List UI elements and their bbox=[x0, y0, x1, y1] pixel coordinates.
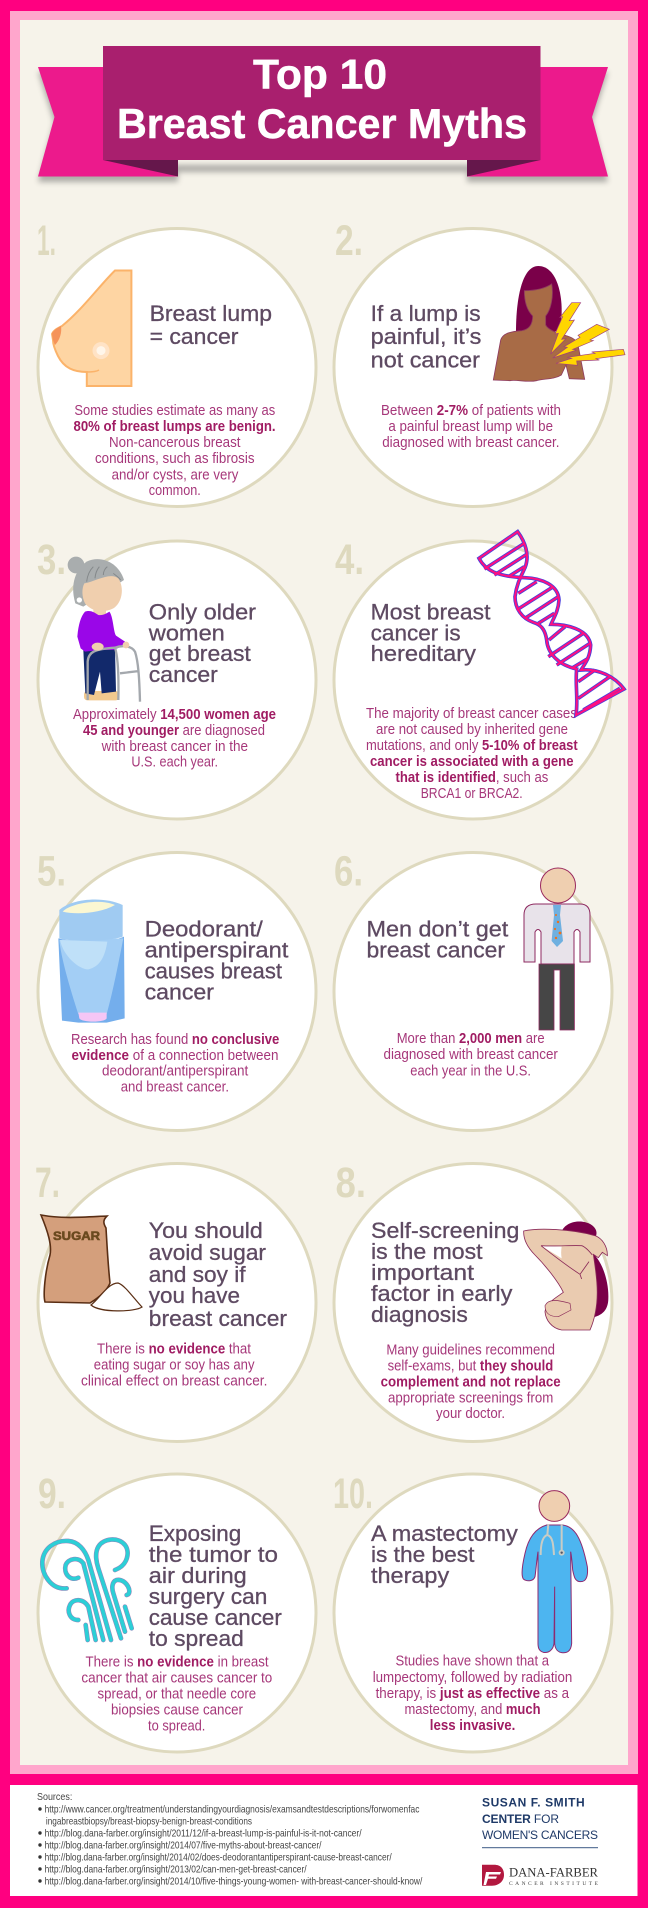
body text: myth 3 bbox=[73, 707, 276, 770]
panel: myth 1 bbox=[37, 217, 316, 506]
heading: myth 9: the tumor to bbox=[149, 1542, 278, 1567]
heading: myth 9: cause cancer bbox=[149, 1605, 282, 1630]
heading: myth 2: If a lump is bbox=[371, 301, 481, 326]
body text: myth 6: diagnosed with breast cancer bbox=[384, 1047, 558, 1063]
body text: myth 9: biopsies cause cancer bbox=[111, 1703, 243, 1719]
heading: myth 6: Men don’t get bbox=[366, 916, 508, 941]
body text: myth 4: are not caused by inherited gene bbox=[376, 722, 568, 738]
panel: myth 7 bbox=[35, 1159, 316, 1442]
body text: myth 5: Research has found no conclusive bbox=[71, 1032, 279, 1048]
heading: myth 10: is the best bbox=[371, 1542, 474, 1567]
heading: myth 7: You should bbox=[149, 1218, 263, 1243]
panel: myth 10: 10. bbox=[333, 1470, 373, 1518]
title text: Breast Cancer Myths bbox=[117, 100, 527, 147]
body text: myth 9: to spread. bbox=[148, 1719, 205, 1735]
body text: myth 3: with breast cancer in the bbox=[101, 739, 248, 755]
heading: myth 1 bbox=[150, 301, 272, 349]
body text: myth 2: a painful breast lump will be bbox=[388, 419, 553, 435]
heading: myth 7: avoid sugar bbox=[149, 1240, 266, 1265]
panel: myth 5: 5. bbox=[37, 848, 66, 896]
body text: myth 7: clinical effect on breast cancer. bbox=[81, 1374, 267, 1390]
logo: Susan F. Smith Center bbox=[482, 1796, 598, 1848]
heading: myth 2: not cancer bbox=[371, 348, 480, 372]
heading: myth 9: air during bbox=[149, 1563, 247, 1588]
body text: myth 9: There is no evidence in breast bbox=[86, 1654, 269, 1670]
heading: myth 7: you have bbox=[149, 1283, 240, 1308]
body text: myth 9: spread, or that needle core bbox=[98, 1687, 256, 1703]
body text: myth 1: common. bbox=[149, 483, 201, 499]
body text: myth 10: mastectomy, and much bbox=[404, 1702, 540, 1718]
icon: breast with lump bbox=[52, 270, 131, 386]
logo: Susan F. Smith Center: WOMEN'S CANCERS bbox=[482, 1828, 598, 1842]
heading: myth 4: cancer is bbox=[371, 620, 461, 646]
body text: myth 10: less invasive. bbox=[430, 1718, 515, 1734]
heading: myth 5: cancer bbox=[145, 980, 214, 1004]
panel: myth 9: 9. bbox=[38, 1470, 66, 1518]
heading: myth 10: therapy bbox=[371, 1563, 449, 1588]
icon: woman self-examining bbox=[524, 1222, 608, 1330]
sources list: http://blog.dana-farber.org/insight/2013/02/can-men-get-breast-cancer/ bbox=[45, 1864, 307, 1876]
icon: doctor with stethoscope bbox=[522, 1491, 588, 1653]
sources list: http://blog.dana-farber.org/insight/2011/12/if-a-breast-lump-is-painful-is-it-not-cancer/ bbox=[45, 1828, 362, 1840]
sources list: http://blog.dana-farber.org/insight/2014/02/does-deodorantantiperspirant-cause-breast-cancer/ bbox=[45, 1852, 392, 1864]
heading: myth 10 bbox=[371, 1521, 518, 1588]
panel: myth 5 bbox=[37, 848, 316, 1130]
heading: myth 5: antiperspirant bbox=[145, 937, 288, 962]
heading: myth 9: Exposing bbox=[149, 1521, 241, 1546]
heading: myth 7 bbox=[149, 1218, 287, 1331]
body text: myth 10: lumpectomy, followed by radiation bbox=[373, 1670, 572, 1686]
heading: myth 2 bbox=[371, 301, 481, 372]
body text: myth 1: 80% of breast lumps are benign. bbox=[74, 419, 276, 435]
heading: myth 10: A mastectomy bbox=[371, 1521, 518, 1546]
body text: myth 8: self-exams, but they should bbox=[388, 1358, 553, 1374]
icon: man with tie bbox=[524, 868, 590, 1030]
icon: deodorant stick bbox=[58, 900, 125, 1023]
heading: myth 3: Only older bbox=[149, 600, 256, 624]
logo: Dana-Farber: DANA-FARBER bbox=[509, 1866, 599, 1880]
panel: myth 7: 7. bbox=[35, 1159, 60, 1207]
body text: myth 8: Many guidelines recommend bbox=[386, 1342, 555, 1358]
logo: Dana-Farber bbox=[482, 1865, 599, 1887]
heading: myth 2: painful, it’s bbox=[371, 324, 481, 349]
panel: myth 8 bbox=[334, 1159, 612, 1442]
body text: myth 8: your doctor. bbox=[436, 1406, 505, 1422]
heading: myth 3: women bbox=[148, 620, 225, 646]
heading: myth 4: hereditary bbox=[371, 641, 476, 666]
heading: myth 3: cancer bbox=[149, 662, 218, 687]
body text: myth 1: Some studies estimate as many as bbox=[74, 403, 275, 419]
heading: myth 6 bbox=[366, 916, 508, 962]
logo: Dana-Farber: CANCER INSTITUTE bbox=[509, 1881, 599, 1887]
panel: myth 9 bbox=[38, 1470, 316, 1752]
heading: myth 7: and soy if bbox=[149, 1262, 246, 1287]
body text: myth 7: There is no evidence that bbox=[97, 1342, 251, 1358]
panel: myth 10 bbox=[333, 1470, 612, 1752]
body text: myth 4: BRCA1 or BRCA2. bbox=[421, 786, 523, 802]
heading: myth 5: causes breast bbox=[145, 958, 282, 984]
icon: woman with pain bolts bbox=[493, 266, 625, 381]
heading: myth 5: Deodorant/ bbox=[145, 916, 264, 941]
heading: myth 7: breast cancer bbox=[149, 1306, 287, 1331]
body text: myth 2 bbox=[381, 403, 561, 451]
body text: myth 4: that is identified, such as bbox=[396, 770, 548, 786]
body text: myth 1: conditions, such as fibrosis bbox=[95, 451, 254, 467]
panel: myth 2: 2. bbox=[335, 217, 363, 265]
panel: myth 8: 8. bbox=[336, 1159, 366, 1207]
body text: myth 5: and breast cancer. bbox=[121, 1080, 229, 1096]
body text: myth 5: evidence of a connection between bbox=[72, 1048, 278, 1064]
body text: myth 5: deodorant/antiperspirant bbox=[102, 1064, 248, 1080]
heading: myth 8: important bbox=[371, 1260, 474, 1285]
title text: Top 10 bbox=[253, 51, 387, 98]
body text: myth 3: U.S. each year. bbox=[131, 754, 218, 770]
panel: myth 6 bbox=[334, 848, 612, 1130]
sources list: http://blog.dana-farber.org/insight/2014/10/five-things-young-women- with-breast-cancer-should-know/ bbox=[45, 1876, 422, 1888]
body text: myth 4: cancer is associated with a gene bbox=[370, 754, 574, 770]
body text: myth 4: mutations, and only 5-10% of breast bbox=[366, 738, 578, 754]
panel: myth 1: 1. bbox=[37, 217, 56, 265]
icon: sugar bag bbox=[41, 1215, 142, 1311]
icon: air swirls bbox=[42, 1540, 132, 1640]
body text: myth 6 bbox=[384, 1031, 558, 1079]
heading: myth 3 bbox=[148, 600, 256, 687]
panel: myth 4: 4. bbox=[335, 536, 364, 584]
body text: myth 3: 45 and younger are diagnosed bbox=[83, 723, 265, 739]
heading: myth 8 bbox=[371, 1218, 519, 1327]
heading: myth 8: Self-screening bbox=[371, 1218, 519, 1243]
body text: myth 4 bbox=[366, 706, 578, 802]
body text: myth 8: complement and not replace bbox=[381, 1374, 561, 1390]
icon: sugar bag: SUGAR bbox=[53, 1229, 100, 1243]
heading: myth 9: to spread bbox=[149, 1626, 244, 1651]
body text: myth 8 bbox=[381, 1342, 561, 1422]
body text: myth 7: eating sugar or soy has any bbox=[94, 1358, 255, 1374]
body text: myth 4: The majority of breast cancer cases bbox=[366, 706, 577, 722]
body text: myth 1 bbox=[74, 403, 276, 499]
heading: myth 1: = cancer bbox=[150, 324, 238, 349]
body text: myth 10: therapy, is just as effective as a bbox=[376, 1686, 570, 1702]
body text: myth 10 bbox=[373, 1654, 572, 1734]
body text: myth 2: Between 2-7% of patients with bbox=[381, 403, 561, 419]
heading: myth 8: factor in early bbox=[371, 1281, 512, 1306]
body text: myth 1: and/or cysts, are very bbox=[112, 467, 239, 483]
body text: myth 8: appropriate screenings from bbox=[388, 1390, 553, 1406]
heading: myth 4: Most breast bbox=[371, 600, 490, 624]
heading: myth 9: surgery can bbox=[149, 1584, 267, 1609]
sources list bbox=[37, 1791, 422, 1888]
body text: myth 2: diagnosed with breast cancer. bbox=[382, 435, 560, 451]
body text: myth 6: More than 2,000 men are bbox=[397, 1031, 545, 1047]
logo: Susan F. Smith Center: CENTER FOR bbox=[482, 1812, 559, 1826]
sources list: Sources: bbox=[37, 1791, 72, 1803]
heading: myth 9 bbox=[149, 1521, 282, 1651]
body text: myth 9: cancer that air causes cancer to bbox=[81, 1670, 272, 1686]
body text: myth 9 bbox=[81, 1654, 272, 1735]
sources list: http://blog.dana-farber.org/insight/2014/07/five-myths-about-breast-cancer/ bbox=[45, 1840, 322, 1852]
body text: myth 1: Non-cancerous breast bbox=[109, 435, 240, 451]
heading: myth 8: is the most bbox=[371, 1239, 483, 1264]
heading: myth 8: diagnosis bbox=[371, 1302, 468, 1327]
logo: Susan F. Smith Center: SUSAN F. SMITH bbox=[482, 1796, 585, 1810]
icon: older woman with walker bbox=[68, 557, 140, 702]
sources list: ingabreastbiopsy/breast-biopsy-benign-breast-conditions bbox=[46, 1816, 252, 1828]
sources list: http://www.cancer.org/treatment/understandingyourdiagnosis/examsandtestdescriptions/forwomenfac bbox=[45, 1804, 419, 1816]
heading: myth 3: get breast bbox=[149, 641, 251, 666]
title text bbox=[117, 51, 527, 147]
heading: myth 6: breast cancer bbox=[366, 937, 505, 962]
panel: myth 3 bbox=[37, 536, 316, 819]
panel: myth 6: 6. bbox=[334, 848, 363, 896]
footer panel bbox=[10, 1785, 638, 1896]
body text: myth 5 bbox=[71, 1032, 279, 1096]
title banner bbox=[38, 46, 608, 182]
heading: myth 1: Breast lump bbox=[150, 301, 272, 326]
body text: myth 6: each year in the U.S. bbox=[410, 1063, 531, 1079]
panel: myth 3: 3. bbox=[37, 536, 66, 584]
body text: myth 10: Studies have shown that a bbox=[396, 1654, 550, 1670]
body text: myth 3: Approximately 14,500 women age bbox=[73, 707, 276, 723]
heading: myth 5 bbox=[145, 916, 288, 1004]
panel: myth 4 bbox=[334, 532, 624, 819]
panel: myth 2 bbox=[334, 217, 625, 506]
heading: myth 4 bbox=[371, 600, 490, 666]
body text: myth 7 bbox=[81, 1342, 267, 1390]
icon: DNA helix bbox=[479, 532, 624, 715]
